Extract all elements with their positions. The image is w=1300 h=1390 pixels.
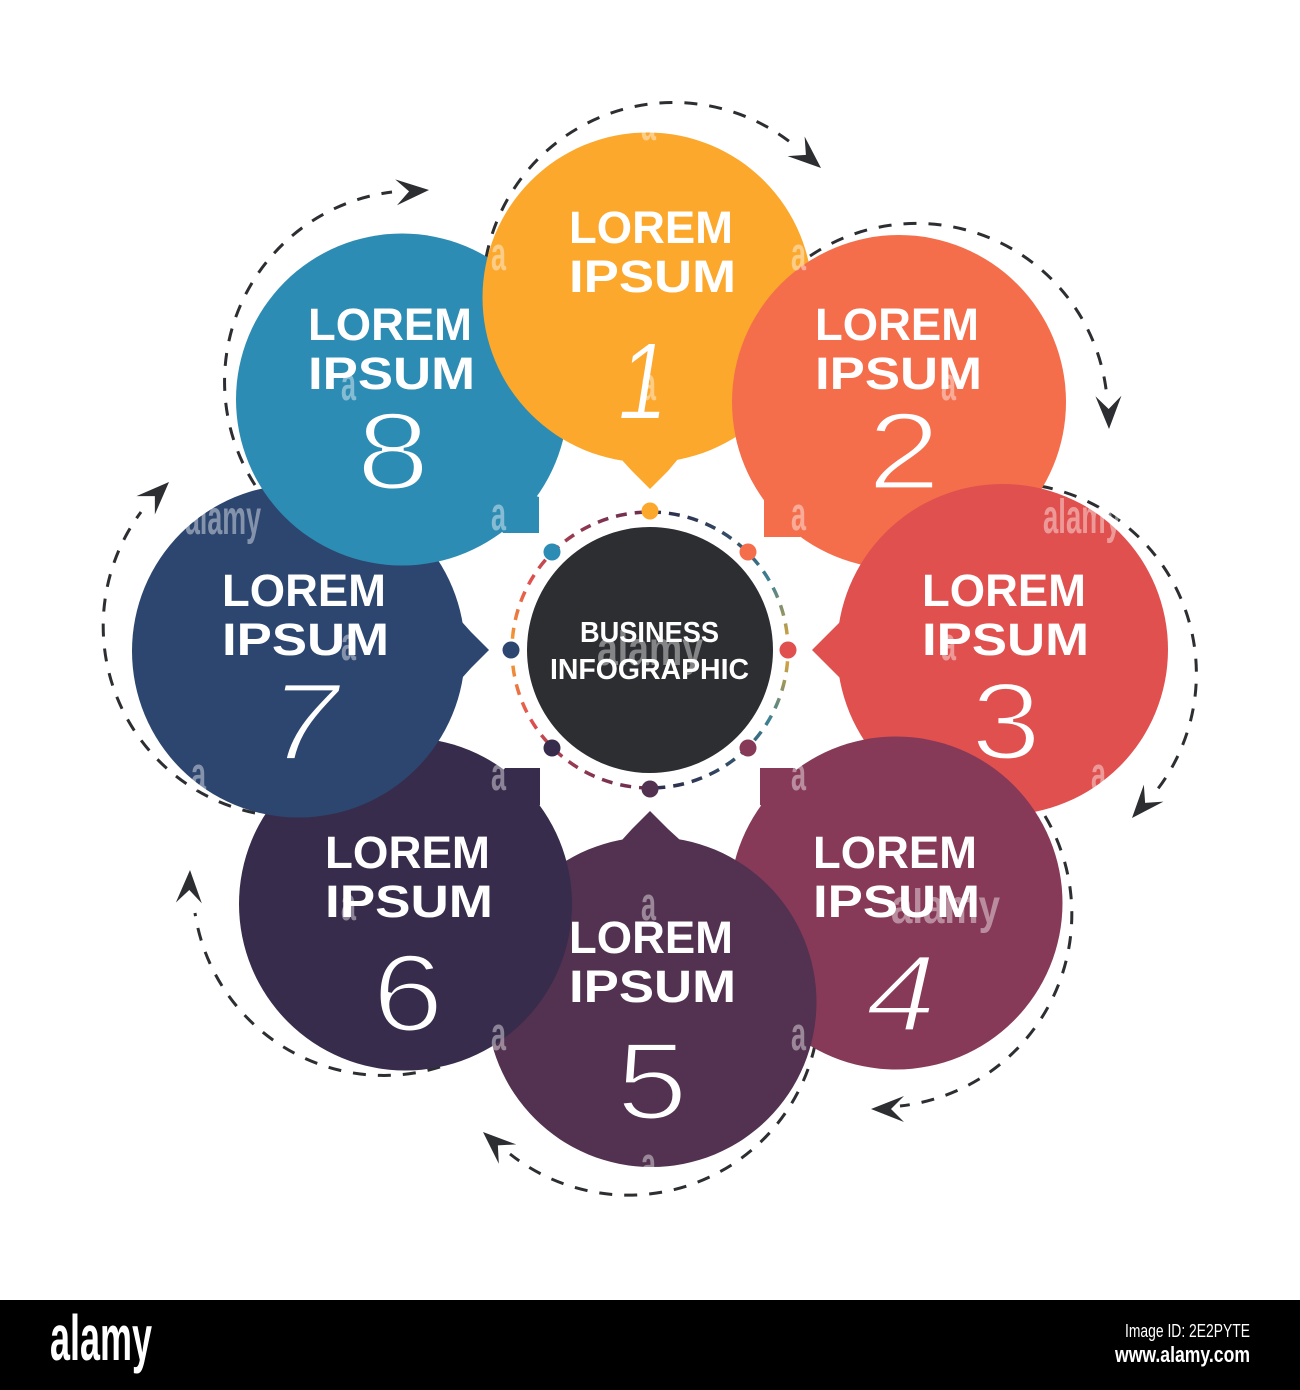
watermarks: a (341, 877, 356, 930)
watermarks: alamy (1043, 491, 1121, 544)
heading: step 2: LOREM (815, 299, 979, 350)
watermarks: a (791, 487, 806, 540)
panel: step 5 (486, 811, 816, 1167)
watermarks: a (641, 357, 656, 410)
panel: step 7 (132, 484, 489, 818)
watermarks: a (191, 747, 206, 800)
watermarks: a (491, 747, 506, 800)
heading: step 6: IPSUM (325, 876, 493, 927)
panel: step 2 (732, 235, 1066, 569)
website: www.alamy.com (1114, 1342, 1250, 1367)
panel: step 8 (236, 234, 568, 566)
dashed arrow 4 (871, 816, 1072, 1122)
watermarks: a (641, 877, 656, 930)
watermarks: a (641, 1137, 656, 1190)
watermarks: a (341, 357, 356, 410)
watermarks: a (791, 747, 806, 800)
heading: step 4: LOREM (813, 827, 977, 878)
number 6: 6 (372, 933, 444, 1055)
center circle (527, 527, 773, 773)
heading: step 5 (569, 912, 736, 1012)
heading: step 6: LOREM (325, 827, 490, 878)
watermarks: a (491, 227, 506, 280)
dashed arrow 1 (486, 102, 830, 258)
watermarks: a (1091, 747, 1106, 800)
heading: step 7: IPSUM (222, 614, 389, 665)
heading: step 5: LOREM (569, 912, 733, 963)
number 2: 2 (867, 389, 941, 513)
heading: step 6 (325, 827, 493, 927)
number 1: 1 (618, 321, 668, 443)
panel: step 3 (812, 484, 1168, 815)
watermarks: a (791, 1007, 806, 1060)
center title: BUSINESS (580, 617, 719, 649)
ring markers (502, 502, 796, 798)
watermarks: a (491, 1007, 506, 1060)
heading: step 4: IPSUM (813, 876, 980, 927)
heading: step 1 (569, 202, 736, 302)
watermarks: alamy (891, 881, 1000, 934)
heading: step 7: LOREM (222, 565, 386, 616)
watermarks: alamy (185, 492, 261, 545)
number 5: 5 (616, 1021, 688, 1143)
center title (550, 617, 749, 686)
dashed arrow 8 (225, 177, 430, 485)
heading: step 8: LOREM (308, 299, 472, 350)
watermarks: a (491, 487, 506, 540)
heading: step 3 (922, 565, 1089, 665)
heading: step 3: LOREM (922, 565, 1086, 616)
dashed arrow 7 (103, 473, 255, 813)
watermarks: alamy (597, 623, 703, 676)
panel: step 6 (239, 738, 572, 1070)
watermarks: a (641, 97, 656, 150)
watermarks (185, 97, 1121, 1190)
image id: Image ID: 2E2PYTE (1125, 1321, 1250, 1341)
watermarks: a (341, 617, 356, 670)
heading: step 7 (222, 565, 389, 665)
watermarks: a (941, 357, 956, 410)
footer logo: alamy (50, 1302, 152, 1374)
number 7: 7 (270, 660, 343, 784)
heading: step 2: IPSUM (815, 348, 982, 399)
dashed ring (512, 512, 788, 788)
dashed arrow 6 (176, 870, 440, 1075)
heading: step 4 (813, 827, 980, 927)
panel: step 4 (730, 736, 1062, 1070)
heading: step 8 (308, 299, 475, 399)
number 3: 3 (971, 661, 1041, 783)
number 8: 8 (356, 389, 430, 513)
footer bar (0, 1300, 1300, 1390)
dashed arrow 5 (474, 1045, 815, 1195)
heading: step 3: IPSUM (922, 614, 1089, 665)
heading: step 1: LOREM (569, 202, 733, 253)
dashed arrow 2 (810, 223, 1122, 429)
center title: INFOGRAPHIC (550, 654, 749, 686)
watermarks: a (941, 617, 956, 670)
heading: step 1: IPSUM (569, 251, 736, 302)
watermarks: a (791, 227, 806, 280)
overlap: step 2 disc over step 1 (732, 259, 812, 480)
panel: step 1 (482, 132, 812, 489)
heading: step 5: IPSUM (569, 961, 736, 1012)
heading: step 8: IPSUM (308, 348, 475, 399)
heading: step 2 (815, 299, 982, 399)
number 4: 4 (866, 933, 936, 1055)
dashed arrow 3 (1040, 486, 1196, 827)
